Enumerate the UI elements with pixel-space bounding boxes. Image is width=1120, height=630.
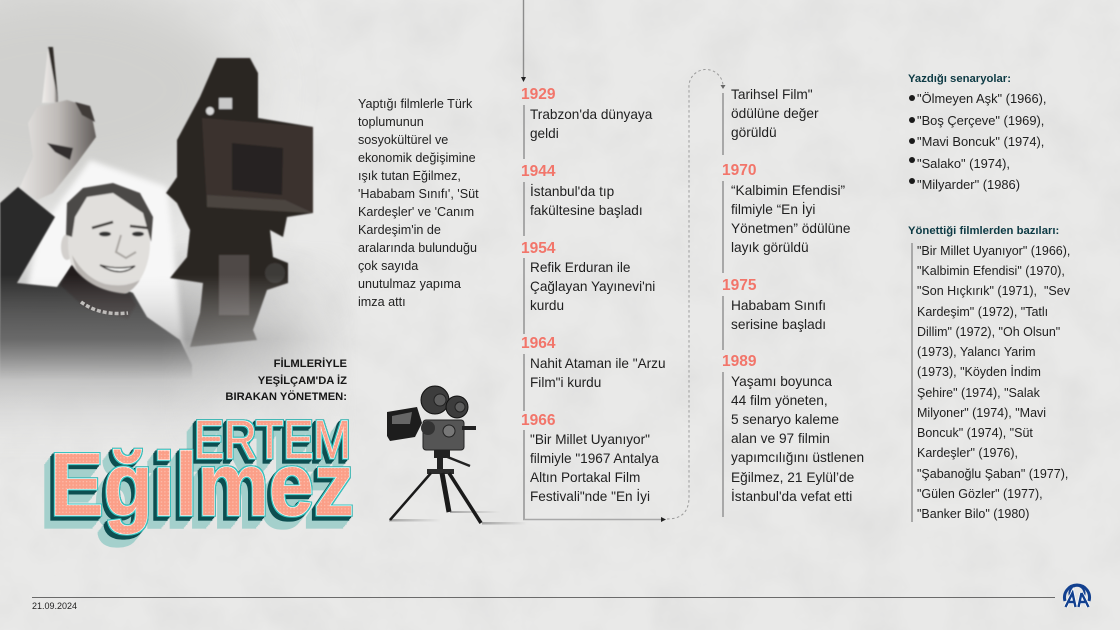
film list: (1973), Yalancı Yarim: [917, 345, 1036, 359]
1964: Film"i kurdu: [530, 375, 601, 390]
intro text: Kardeşim'in de: [358, 223, 441, 237]
1975: 1975: [722, 277, 756, 294]
1975: serisine başladı: [731, 317, 826, 332]
list: "Salako" (1974),: [917, 156, 1010, 170]
subtitle: YEŞİLÇAM'DA İZ: [258, 375, 347, 387]
intro text: Yaptığı filmlerle Türk: [358, 96, 472, 110]
intro text: ekonomik değişimine: [358, 151, 476, 165]
intro text: Kardeşler' ve 'Canım: [358, 205, 474, 219]
1964: Nahit Ataman ile "Arzu: [530, 356, 666, 370]
subtitle: BIRAKAN YÖNETMEN:: [225, 391, 347, 403]
film list: "Son Hıçkırık" (1971), "Sev: [917, 284, 1070, 298]
footer rule: [32, 597, 1055, 598]
1989: İstanbul'da vefat etti: [731, 489, 852, 504]
divider bar: [911, 243, 913, 522]
1944: fakültesine başladı: [530, 203, 643, 218]
raised hand: [20, 47, 96, 200]
1970: [722, 162, 850, 273]
film list: "Kalbimin Efendisi" (1970),: [917, 264, 1065, 278]
1964: 1964: [521, 335, 555, 352]
1966: Festivali"nde "En İyi: [530, 489, 650, 504]
film list: Dillim" (1972), "Oh Olsun": [917, 325, 1060, 339]
1989: alan ve 97 filmin: [731, 431, 830, 446]
title: Ertem Eğilmez: [44, 410, 354, 548]
film camera: [166, 58, 313, 347]
collar highlight: [81, 302, 128, 314]
film list: "Bir Millet Uyanıyor" (1966),: [917, 244, 1070, 258]
heading: Yönettiği filmlerden bazıları:: [908, 224, 1059, 236]
award continued: ödülüne değer: [731, 106, 819, 121]
panel: directed films: [908, 224, 1070, 522]
1970: layık görüldü: [731, 240, 809, 255]
film list: "Banker Bilo" (1980): [917, 507, 1029, 521]
award continued: [722, 87, 819, 155]
1989: 44 film yöneten,: [731, 393, 828, 408]
award continued: Tarihsel Film": [731, 87, 813, 102]
1944: [521, 163, 643, 236]
1970: “Kalbimin Efendisi”: [731, 182, 845, 198]
1975: Hababam Sınıfı: [731, 298, 826, 312]
1944: İstanbul'da tıp: [530, 184, 614, 198]
1970: Yönetmen” ödülüne: [731, 221, 850, 236]
ERTEM: ERTEM: [194, 410, 351, 470]
1989: 5 senaryo kaleme: [731, 412, 839, 427]
intro text: unutulmaz yapıma: [358, 277, 461, 291]
film list: Boncuk" (1974), "Süt: [917, 426, 1033, 440]
award continued: görüldü: [731, 125, 777, 140]
1966: Altın Portakal Film: [530, 470, 640, 485]
list: "Mavi Boncuk" (1974),: [917, 134, 1044, 149]
list: "Milyarder" (1986): [917, 177, 1020, 192]
film list: Kardeşim" (1972), "Tatlı: [917, 305, 1048, 319]
white backdrop behind portrait: [20, 160, 185, 360]
lower-left mist: [0, 252, 340, 423]
intro text: ışık tutan Eğilmez,: [358, 169, 461, 183]
date: 21.09.2024: [32, 600, 77, 610]
Eğilmez: Eğilmez: [50, 434, 354, 534]
film list: Milyoner" (1974), "Mavi: [917, 406, 1046, 420]
1929: [521, 86, 652, 159]
1954: [521, 240, 655, 334]
1929: 1929: [521, 86, 555, 103]
timeline arrows: [521, 0, 726, 522]
1954: 1954: [521, 240, 555, 257]
list: [917, 91, 1047, 192]
1954: Refik Erduran ile: [530, 260, 630, 274]
1970: filmiyle “En İyi: [731, 202, 815, 217]
1975: [722, 277, 826, 350]
list: "Boş Çerçeve" (1969),: [917, 112, 1044, 128]
1966: [521, 412, 659, 519]
1966: filmiyle "1967 Antalya: [530, 451, 659, 466]
list: "Ölmeyen Aşk" (1966),: [917, 91, 1047, 106]
turtleneck collar: [60, 265, 136, 319]
1944: 1944: [521, 163, 555, 180]
icon: AA logo: [1062, 584, 1092, 608]
film list: Kardeşler" (1976),: [917, 446, 1018, 460]
1954: Çağlayan Yayınevi'ni: [530, 279, 655, 294]
film list: (1973), "Köyden İndim: [917, 365, 1041, 379]
intro text: [358, 96, 479, 309]
face: [61, 183, 153, 299]
intro text: imza attı: [358, 295, 406, 309]
heading: Yazdığı senaryolar:: [908, 72, 1011, 84]
1989: 1989: [722, 353, 756, 370]
1929: geldi: [530, 126, 559, 141]
intro text: sosyokültürel ve: [358, 133, 448, 147]
panel: screenplays: [908, 72, 1047, 192]
film list: [917, 244, 1070, 521]
intro text: 'Hababam Sınıfı', 'Süt: [358, 187, 479, 201]
1966: "Bir Millet Uyanıyor": [530, 432, 650, 446]
1954: kurdu: [530, 298, 564, 313]
1966: 1966: [521, 412, 555, 429]
1989: yapımcılığını üstlenen: [731, 450, 864, 465]
film list: "Gülen Gözler" (1977),: [917, 487, 1043, 501]
arm and sweater: [0, 187, 192, 380]
icon: vintage movie camera on tripod: [387, 386, 522, 524]
1989: Eğilmez, 21 Eylül’de: [731, 470, 854, 485]
1989: Yaşamı boyunca: [731, 374, 832, 388]
1989: [722, 353, 864, 517]
1929: Trabzon'da dünyaya: [530, 107, 652, 122]
film list: Şehire" (1974), "Salak: [917, 386, 1040, 400]
intro text: toplumunun: [358, 115, 424, 129]
film list: "Şabanoğlu Şaban" (1977),: [917, 467, 1068, 481]
subtitle: FİLMLERİYLE: [274, 358, 347, 370]
subtitle: [225, 358, 347, 403]
1970: 1970: [722, 162, 756, 179]
photo: director with film camera: [0, 46, 314, 376]
intro text: çok sayıda: [358, 259, 418, 273]
1964: [521, 335, 666, 411]
intro text: aralarında bulunduğu: [358, 241, 477, 255]
